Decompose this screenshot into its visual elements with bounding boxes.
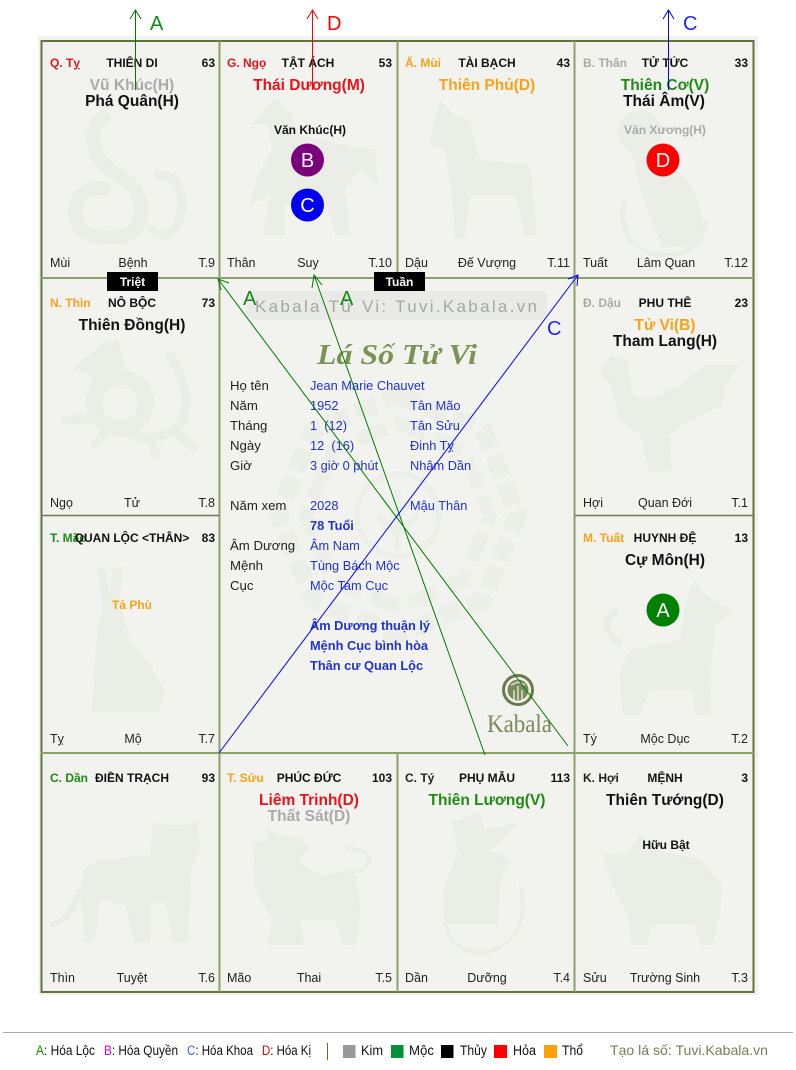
palace: Tử Tức: T.12 [724,256,748,270]
legend: transformations: B: Hóa Quyền [104,1043,178,1058]
birth information: Nhâm Dần [410,458,471,473]
palace: Phu Thê: T.1 [731,496,748,510]
legend: five elements [343,1043,583,1058]
birth information: 3 giờ 0 phút [310,458,379,473]
palace: Huynh Đệ: 13 [735,531,748,545]
palace: Tử Tức: Tuất [583,256,608,270]
birth information: Ngày [230,438,261,453]
birth information: Mậu Thân [410,498,467,513]
legend: five elements: Kim [361,1043,383,1058]
palace: Điền Trạch [50,770,215,985]
palace: Điền Trạch: C. Dần [50,771,88,785]
birth information: Âm Dương [230,538,295,553]
palace: Phu Thê: 23 [735,296,748,310]
birth information: Mộc Tam Cục [310,578,389,593]
palace: Mệnh: 3 [741,771,748,785]
Kabala logo [487,676,552,738]
palace: Nô Bộc [50,295,215,510]
palace: Phúc Đức: T.5 [375,971,392,985]
palace: Tử Tức: Thái Âm(V) [623,92,705,110]
birth information: Mệnh [230,558,263,573]
legend: five elements: Thủy [460,1043,487,1058]
palace: Huynh Đệ: T.2 [731,732,748,746]
arrow: C Thiên Cơ: C [683,13,697,35]
palace: Tật Ách: Văn Khúc(H) [274,123,346,137]
birth information: Âm Dương thuận lý [310,618,431,633]
palace: Quan Lộc: Tỵ [50,732,65,746]
palace: Tài Bạch: Ấ. Mùi [405,55,441,70]
palace: Tật Ách: T.10 [368,256,392,270]
birth information: Tân Mão [410,398,461,413]
palace: Phụ Mẫu: Thiên Lương(V) [429,792,545,809]
arrow: A to Thái Dương cell corner [218,279,568,746]
palace: Tử Tức: TỬ TỨC [642,55,689,70]
palace: Tử Tức: D [656,150,670,172]
birth information: Họ tên [230,378,269,393]
palace: Phụ Mẫu [405,770,570,985]
birth information: 78 Tuổi [310,518,354,533]
palace: Phụ Mẫu: Dưỡng [467,971,507,985]
palace: Phúc Đức: PHÚC ĐỨC [277,770,342,785]
birth information: 2028 [310,498,338,513]
palace: Thiên Di [50,55,215,270]
palace: Tật Ách: Thái Dương(M) [253,77,365,94]
palace: Nô Bộc: Ngọ [50,496,73,510]
birth information: Năm xem [230,498,286,513]
palace: Tài Bạch: Dậu [405,256,428,270]
palace: Điền Trạch: T.6 [198,971,215,985]
arrow: D Thái Dương: D [327,13,341,35]
palace: Thiên Di: THIÊN DI [106,55,158,70]
palace: Quan Lộc: T. Mão [50,531,87,545]
palace: Huynh Đệ: HUYNH ĐỆ [634,530,696,545]
palace: Phụ Mẫu: PHỤ MẪU [459,770,515,785]
palace: Tài Bạch: TÀI BẠCH [458,55,516,70]
Kabala logo: Kabala [487,711,552,738]
palace: Mệnh: K. Hợi [583,771,619,785]
palace: Thiên Di: Mùi [50,256,70,270]
palace: Nô Bộc: 73 [202,296,215,310]
legend: five elements: Thổ [562,1043,583,1058]
palace: Điền Trạch: Tuyệt [117,971,148,985]
arrow: A to Thái Dương cell corner: A [243,288,257,310]
grid of palaces [41,41,754,992]
palace: Phu Thê [583,295,748,510]
palace: Quan Lộc: Mộ [124,732,142,746]
watermark banner [247,291,547,320]
badge: Triệt: Triệt [120,275,145,289]
palace: Nô Bộc: N. Thìn [50,296,91,310]
birth information: Tân Sửu [410,418,460,433]
birth information: Tùng Bách Mộc [310,558,400,573]
arrow: A Vũ Khúc: A [150,13,164,35]
palace: Thiên Di: 63 [202,56,215,70]
palace: Mệnh: Hữu Bật [642,838,690,852]
palace: Tài Bạch [405,55,570,270]
birth information: Tháng [230,418,267,433]
arrow: C from Điền Trạch: C [547,318,561,340]
bagua watermark [278,395,518,635]
arrow: A to Suy [312,275,485,755]
palace: Tử Tức: B. Thân [583,56,627,70]
footer divider [3,1032,793,1033]
palace: Mệnh: MỆNH [647,770,683,785]
zodiac watermarks [50,98,740,953]
legend: five elements: Hỏa [513,1043,536,1058]
palace: Điền Trạch: Thìn [50,971,75,985]
palace: Mệnh [583,770,748,985]
palace: Tử Tức: Lâm Quan [637,256,695,270]
birth information: Cục [230,578,254,593]
palace: Tử Tức: Thiên Cơ(V) [621,77,709,94]
palace: Tử Tức [583,55,748,270]
palace: Tài Bạch: T.11 [547,256,570,270]
palace: Huynh Đệ [583,530,748,746]
palace: Phụ Mẫu: T.4 [553,971,570,985]
palace: Phúc Đức: Liêm Trinh(D) [259,792,359,809]
palace: Phu Thê: Quan Đới [638,496,692,510]
palace: Tài Bạch: Thiên Phủ(D) [439,77,535,94]
palace: Mệnh: Trường Sinh [630,971,700,985]
palace: Nô Bộc: T.8 [198,496,215,510]
birth information: Âm Nam [310,538,360,553]
birth information: Năm [230,398,258,413]
palace: Thiên Di: Vũ Khúc(H) [90,77,174,94]
badge: Tuần: Tuần [386,275,413,289]
palace: Phu Thê: Đ. Dậu [583,296,621,310]
palace: Phu Thê: PHU THÊ [639,295,691,310]
palace: Nô Bộc: Thiên Đồng(H) [79,317,185,334]
birth information: Jean Marie Chauvet [310,378,425,393]
birth information: Thân cư Quan Lộc [310,658,423,673]
badge: Tuần [374,272,425,291]
palace: Phúc Đức: Mão [227,971,251,985]
badge: Triệt [107,272,158,291]
palace: Quan Lộc: 83 [202,531,215,545]
arrow: C Thiên Cơ [663,10,697,90]
palace: Tật Ách: C [300,195,315,217]
birth information [230,378,471,673]
arrow: C from Điền Trạch [219,275,578,753]
birth information: 12 (16) [310,438,354,453]
palace: Phu Thê: Hợi [583,496,603,510]
palace: Thiên Di: Phá Quân(H) [85,93,179,110]
palace: Tật Ách [227,55,392,270]
arrow: A Vũ Khúc [130,10,164,90]
arrow: D Thái Dương [307,10,341,90]
footer site link text: Tạo lá số: Tuvi.Kabala.vn [610,1042,768,1058]
palace: Mệnh: Thiên Tướng(D) [606,792,724,809]
palace: Phúc Đức: Thất Sát(D) [268,808,350,825]
palace: Tử Tức: Văn Xương(H) [624,123,706,137]
palace: Quan Lộc: T.7 [198,732,215,746]
palace: Nô Bộc: Tử [124,496,140,510]
palace: Phúc Đức [227,770,392,985]
palace: Quan Lộc [50,530,215,746]
birth information: 1952 [310,398,338,413]
palace: Phu Thê: Tham Lang(H) [613,333,717,350]
palace: Quan Lộc: Tả Phù [112,598,152,612]
palace: Tài Bạch: 43 [557,56,570,70]
birth information: Mệnh Cục bình hòa [310,638,429,653]
palace: Tật Ách: 53 [379,56,392,70]
palace: Thiên Di: Bệnh [118,256,148,270]
palace: Tật Ách: G. Ngọ [227,56,266,70]
legend: transformations [36,1043,311,1058]
watermark banner: Kabala Tử Vi: Tuvi.Kabala.vn [255,297,537,316]
palace: Phụ Mẫu: 113 [551,771,570,785]
palace: Huynh Đệ: Mộc Dục [640,732,690,746]
palace: Nô Bộc: NÔ BỘC [108,295,156,310]
palace: Tài Bạch: Đế Vượng [458,256,516,270]
title: Lá Số Tử Vi: Lá Số Tử Vi [316,339,477,371]
legend: five elements: Mộc [409,1043,434,1058]
palace: Huynh Đệ: A [656,600,670,622]
palace: Điền Trạch: 93 [202,771,215,785]
birth information: Đinh Tỵ [410,438,454,453]
palace: Quan Lộc: QUAN LỘC <THÂN> [75,530,189,545]
legend: transformations: D: Hóa Kị [262,1043,311,1058]
palace: Phu Thê: Tử Vi(B) [635,317,695,334]
palace: Huynh Đệ: Tý [583,732,598,746]
palace: Tật Ách: B [301,150,314,172]
palace: Phúc Đức: Thai [297,971,321,985]
birth information: 1 (12) [310,418,347,433]
palace: Phúc Đức: T. Sửu [227,771,264,785]
palace: Huynh Đệ: M. Tuất [583,531,624,545]
palace: Điền Trạch: ĐIỀN TRẠCH [95,770,169,785]
palace: Mệnh: Sửu [583,971,607,985]
arrow: A to Suy: A [340,288,354,310]
palace: Tật Ách: Suy [297,256,320,270]
palace: Thiên Di: Q. Tỵ [50,56,80,70]
palace: Tật Ách: Thân [227,256,256,270]
palace: Mệnh: T.3 [731,971,748,985]
legend: transformations: C: Hóa Khoa [187,1043,253,1058]
palace: Tử Tức: 33 [735,56,748,70]
palace: Phúc Đức: 103 [372,771,392,785]
palace: Tật Ách: TẬT ÁCH [282,55,334,70]
birth information: Giờ [230,458,252,473]
palace: Thiên Di: T.9 [198,256,215,270]
legend: transformations: A: Hóa Lộc [36,1043,95,1058]
palace: Huynh Đệ: Cự Môn(H) [625,552,705,569]
palace: Phụ Mẫu: C. Tý [405,771,435,785]
palace: Phụ Mẫu: Dần [405,971,428,985]
